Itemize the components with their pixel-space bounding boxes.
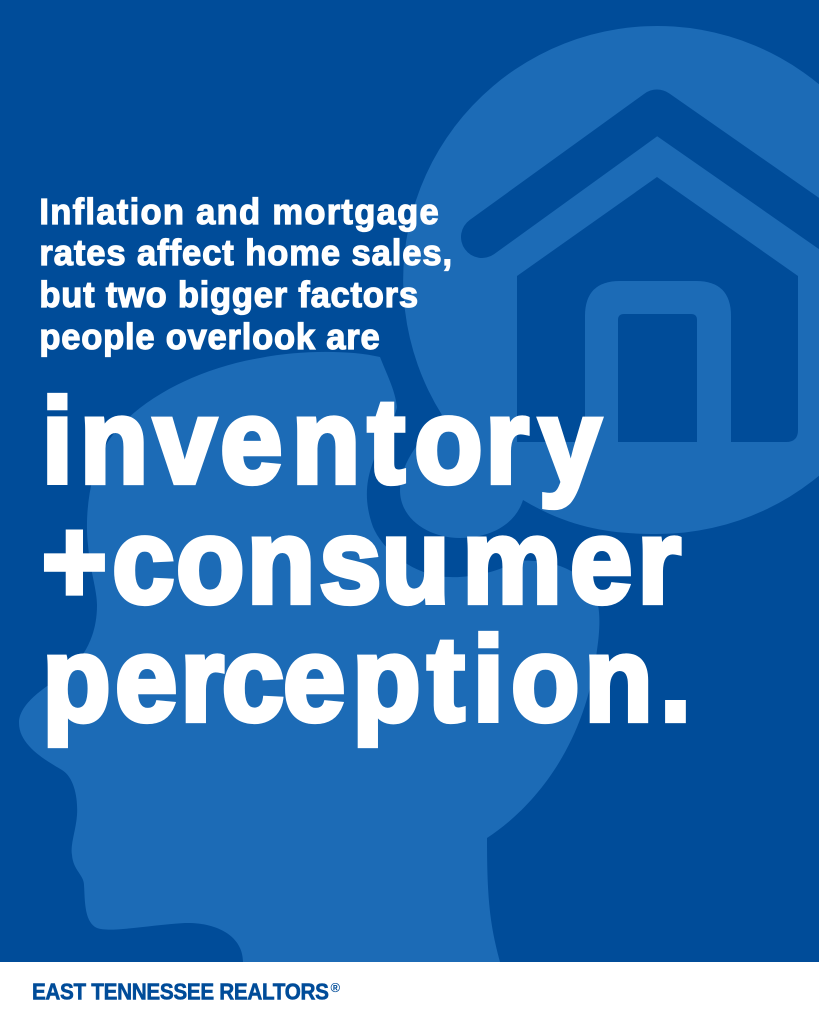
intro text block: but two bigger factors: [39, 275, 418, 315]
intro text block: Inflation and mortgage: [39, 192, 439, 232]
footer bar: [0, 962, 819, 1024]
house roof: [482, 110, 819, 280]
intro text block: rates affect home sales,: [39, 233, 452, 273]
house body: [517, 177, 798, 442]
thought bubble: [400, 26, 819, 538]
icon: thought bubble with house: [400, 26, 819, 538]
main headline: perception.: [42, 612, 691, 746]
intro text block: people overlook are: [39, 317, 380, 357]
main headline: inventory: [42, 374, 601, 508]
main headline: +consumer: [42, 494, 681, 628]
icon: head silhouette: [19, 352, 599, 962]
footer logo text: ®: [330, 980, 340, 995]
footer logo text: EAST TENNESSEE REALTORS: [32, 978, 329, 1005]
intro text block: [39, 192, 452, 357]
door frame: [585, 281, 731, 442]
main headline: [42, 374, 691, 746]
door: [618, 314, 697, 442]
